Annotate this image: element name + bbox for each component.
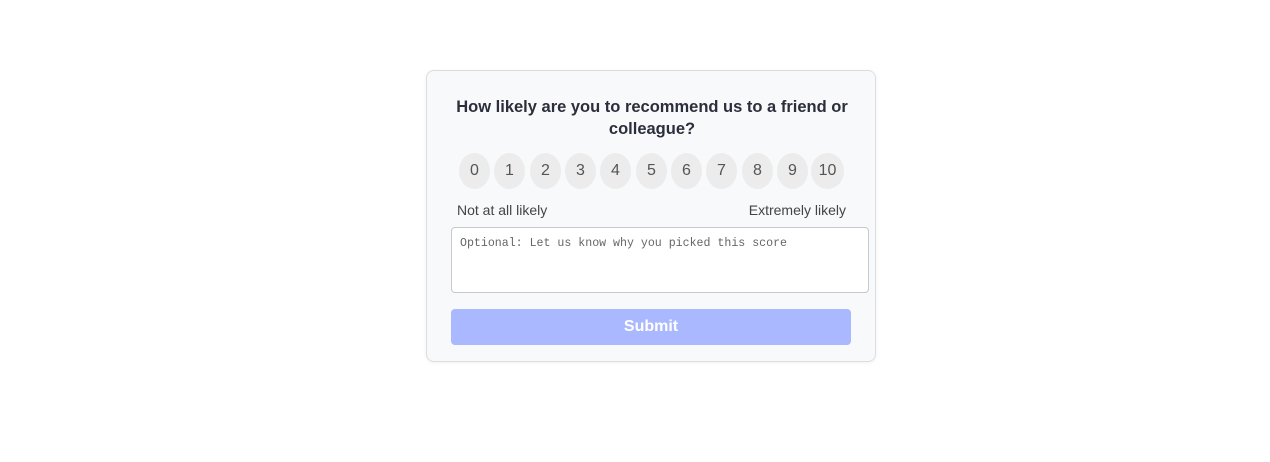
score scale: 5 — [647, 162, 656, 179]
label: low: Not at all likely — [457, 202, 547, 218]
score scale: 3 — [576, 162, 585, 179]
score scale: 6 — [682, 162, 691, 179]
score scale: 9 — [788, 162, 797, 179]
textarea — [451, 227, 869, 293]
submit button: Submit — [624, 318, 678, 335]
score scale: 2 — [541, 162, 550, 179]
score scale: 8 — [753, 162, 762, 179]
score scale: 0 — [470, 162, 479, 179]
score scale: 10 — [819, 162, 836, 179]
title: How likely are you to recommend us to a friend or — [456, 98, 848, 116]
title: colleague? — [609, 120, 695, 138]
score scale: 4 — [611, 162, 620, 179]
submit button — [451, 309, 851, 345]
score scale: 1 — [505, 162, 514, 179]
title — [456, 98, 848, 138]
score scale: 7 — [717, 162, 726, 179]
panel: survey card — [426, 70, 876, 362]
label: high: Extremely likely — [749, 202, 846, 218]
score scale — [459, 153, 844, 189]
textarea: Optional: Let us know why you picked this score — [460, 237, 787, 250]
